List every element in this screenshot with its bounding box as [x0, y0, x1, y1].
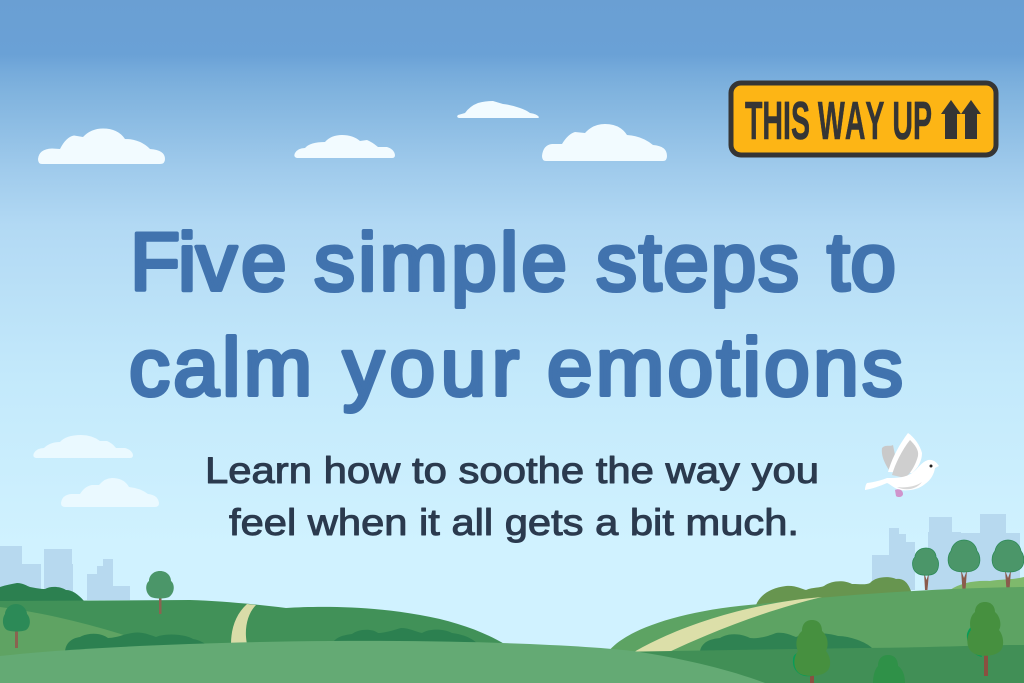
sign arrows — [941, 100, 981, 139]
left bushes behind hill — [0, 583, 84, 601]
title: your — [343, 322, 519, 413]
subtitle — [205, 450, 819, 543]
icon: dove — [865, 433, 939, 497]
subtitle: feel when it all gets a bit much. — [229, 502, 799, 543]
hill: front — [0, 641, 765, 683]
tree 3 — [992, 540, 1024, 590]
hill: left light — [0, 607, 130, 660]
tree: right side — [967, 602, 1003, 676]
left-middle bush — [333, 628, 478, 644]
title: calm — [129, 322, 312, 413]
tree 2 — [948, 540, 980, 590]
cloud 3 — [457, 101, 539, 118]
skyline: right — [872, 514, 1020, 590]
subtitle: Learn how to soothe the way you — [205, 450, 819, 491]
cloud 2 — [294, 135, 395, 158]
path: right — [634, 597, 822, 652]
tree: bottom centre — [873, 655, 905, 683]
tree 1 — [913, 548, 939, 590]
title: Five — [130, 217, 287, 308]
cloud 6 — [61, 478, 159, 507]
title: simple — [314, 217, 567, 308]
cloud 5 — [33, 435, 133, 458]
cloud 1 — [38, 128, 165, 164]
tree: left back — [146, 571, 174, 614]
hill: right main — [608, 587, 1024, 683]
title: emotions — [547, 322, 903, 413]
right back light hill — [950, 577, 1024, 600]
right olive bush — [756, 577, 911, 612]
title: to — [827, 217, 896, 308]
cloud 4 — [542, 124, 667, 161]
path: left — [231, 604, 256, 644]
hill: left back — [0, 600, 506, 660]
road sign: this way up — [731, 83, 996, 155]
tree: left front — [3, 604, 30, 648]
hill: right foreground dark — [608, 645, 1024, 683]
skyline: left — [0, 546, 130, 600]
right trees back — [913, 540, 1024, 590]
right bush — [700, 633, 872, 652]
title — [129, 217, 903, 413]
title: steps — [596, 217, 799, 308]
left bush front — [65, 632, 211, 653]
tree: right foreground — [793, 620, 830, 683]
